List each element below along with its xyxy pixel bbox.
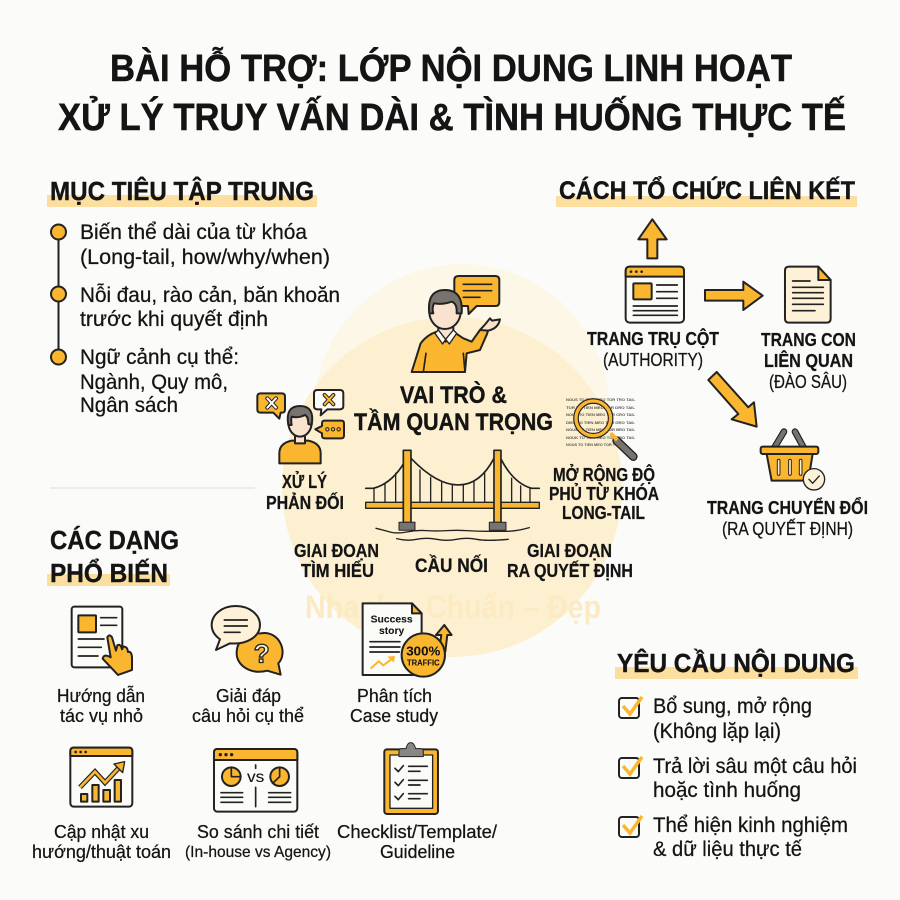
list text: hoặc tình huống xyxy=(653,779,801,802)
icon: magnifier over keywords xyxy=(566,398,635,457)
heading: cách tổ chức liên kết: CÁCH TỔ CHỨC LIÊN KẾT xyxy=(559,175,855,205)
list text: Ngữ cảnh cụ thể: xyxy=(80,346,239,369)
label: hướng dẫn tác vụ nhỏ: Hướng dẫn xyxy=(57,685,145,706)
label: xử lý phản đối: XỬ LÝ xyxy=(282,471,327,492)
arrow: up xyxy=(638,219,667,258)
label: so sánh chi tiết xyxy=(185,822,331,861)
icon: magnifier over keywords: NOUS TO TIEN MEO TOR CRO TAIL xyxy=(566,413,635,417)
label: so sánh chi tiết: (In-house vs Agency) xyxy=(185,844,331,861)
label: hướng dẫn tác vụ nhỏ xyxy=(57,685,145,726)
label: trang con liên quan: TRANG CON xyxy=(761,330,856,350)
icon: pillar page window xyxy=(626,267,684,323)
icon: case study document: TRAFFIC xyxy=(407,658,440,667)
heading: các dạng phổ biến: CÁC DẠNG xyxy=(50,525,179,555)
icon: question speech bubbles xyxy=(212,606,283,675)
label: giải đáp câu hỏi cụ thể xyxy=(192,686,304,726)
icon: magnifier over keywords: TOR TO TIEN MEO TOR DRO TAIL xyxy=(566,406,635,410)
label: trang chuyển đổi: TRANG CHUYỂN ĐỔI xyxy=(707,497,868,518)
panel: các dạng phổ biến xyxy=(32,525,497,862)
label: xử lý phản đối xyxy=(266,471,344,513)
label: trang con liên quan: LIÊN QUAN xyxy=(764,350,853,371)
icon: presenter with speech bubble xyxy=(412,276,500,372)
list text: (Không lặp lại) xyxy=(653,720,781,743)
icon: magnifier over keywords: NOUK TO TIEN MEO TOR TRO TAIL xyxy=(566,436,635,440)
icon: case study document: story xyxy=(379,626,405,637)
list text: Nỗi đau, rào cản, băn khoăn xyxy=(80,284,340,307)
label: mở rộng độ phủ từ khóa: LONG-TAIL xyxy=(562,503,645,523)
icon: suspension bridge xyxy=(366,450,539,540)
heading: mục tiêu tập trung: MỤC TIÊU TẬP TRUNG xyxy=(50,176,314,206)
label: cập nhật xu hướng xyxy=(32,822,171,862)
icon: magnifier over keywords: NOUS TO TIEN MEO TOR TO xyxy=(566,443,619,447)
heading: vai trò và tầm quan trọng: VAI TRÒ & xyxy=(400,381,507,409)
title: XỬ LÝ TRUY VẤN DÀI & TÌNH HUỐNG THỰC TẾ xyxy=(58,94,846,139)
heading: yêu cầu nội dung: YÊU CẦU NỘI DUNG xyxy=(617,648,855,678)
list text: Ngân sách xyxy=(80,394,178,417)
list text: & dữ liệu thực tế xyxy=(653,838,802,861)
label: checklist template guideline: Checklist/Template/ xyxy=(337,822,497,842)
icon: comparison window xyxy=(214,749,297,812)
label: cập nhật xu hướng: Cập nhật xu xyxy=(54,822,149,842)
label: mở rộng độ phủ từ khóa: MỞ RỘNG ĐỘ xyxy=(553,464,655,485)
label: xử lý phản đối: PHẢN ĐỐI xyxy=(266,492,344,513)
list text xyxy=(80,221,340,417)
label: checklist template guideline: Guideline xyxy=(380,842,455,862)
icon: comparison window: vs xyxy=(247,769,265,786)
list text: Thể hiện kinh nghiệm xyxy=(653,814,848,837)
list text: Trả lời sâu một câu hỏi xyxy=(653,755,857,778)
icon: question speech bubbles: ? xyxy=(254,639,270,669)
icon: shopping basket xyxy=(761,432,825,490)
label: giai đoạn tìm hiểu: TÌM HIỂU xyxy=(301,560,374,581)
icons: checkboxes xyxy=(619,697,642,837)
label: giai đoạn tìm hiểu: GIAI ĐOẠN xyxy=(294,541,379,561)
icon: clipboard checklist xyxy=(384,743,438,814)
label: giai đoạn tìm hiểu xyxy=(294,541,379,581)
arrow: diagonal to conversion page xyxy=(708,372,757,427)
panel: cách tổ chức liên kết xyxy=(556,175,868,539)
icon: case study document xyxy=(363,603,452,677)
timeline bullets xyxy=(51,224,66,364)
label: trang chuyển đổi: (RA QUYẾT ĐỊNH) xyxy=(722,518,853,539)
label: mở rộng độ phủ từ khóa xyxy=(549,464,659,523)
label: giai đoạn ra quyết định xyxy=(507,541,633,581)
list text: trước khi quyết định xyxy=(80,308,268,331)
list text: (Long-tail, how/why/when) xyxy=(80,246,330,269)
icon: tutorial document with hand xyxy=(72,607,132,675)
background watermark: Nhanh – Chuẩn – Đẹp xyxy=(305,589,601,625)
list text xyxy=(653,695,857,861)
label: giải đáp câu hỏi cụ thể: Giải đáp xyxy=(216,686,281,706)
label: phân tích case study: Case study xyxy=(350,706,438,726)
heading: vai trò và tầm quan trọng xyxy=(354,381,553,436)
panel: yêu cầu nội dung xyxy=(615,648,858,861)
label: trang con liên quan xyxy=(761,330,856,392)
label: phân tích case study xyxy=(350,686,438,726)
label: phân tích case study: Phân tích xyxy=(357,686,432,706)
list text: Ngành, Quy mô, xyxy=(80,371,228,394)
heading: vai trò và tầm quan trọng: TẦM QUAN TRỌNG xyxy=(354,408,553,436)
heading: các dạng phổ biến: PHỔ BIẾN xyxy=(50,558,168,588)
label: cập nhật xu hướng: hướng/thuật toán xyxy=(32,842,171,862)
icon: person with objections xyxy=(257,390,344,463)
icon: magnifier over keywords: NOUS TO TIEN MEO TOR BRO TAIL xyxy=(566,428,635,432)
label: checklist template guideline xyxy=(337,822,497,862)
label: so sánh chi tiết: So sánh chi tiết xyxy=(197,822,319,842)
label: hướng dẫn tác vụ nhỏ: tác vụ nhỏ xyxy=(60,706,143,726)
icon: trend chart window xyxy=(70,748,132,807)
label: giai đoạn ra quyết định: GIAI ĐOẠN xyxy=(527,541,612,561)
list text: Biến thể dài của từ khóa xyxy=(80,221,307,244)
label: giai đoạn ra quyết định: RA QUYẾT ĐỊNH xyxy=(507,560,633,581)
title: BÀI HỖ TRỢ: LỚP NỘI DUNG LINH HOẠT xyxy=(110,45,792,90)
heading: các dạng phổ biến xyxy=(47,525,179,588)
label: trang chuyển đổi xyxy=(707,497,868,539)
icon: sub page document xyxy=(785,267,831,323)
label: trang trụ cột: (AUTHORITY) xyxy=(603,350,703,370)
label: giải đáp câu hỏi cụ thể: câu hỏi cụ thể xyxy=(192,706,304,726)
background watermark xyxy=(282,264,622,657)
title xyxy=(58,45,846,139)
icon: magnifier over keywords: DIES TO TIEN MEO TOR GRO TAIL xyxy=(566,421,635,425)
panel: vai trò và tầm quan trọng xyxy=(257,276,659,581)
icon: case study document: 300% xyxy=(406,643,440,658)
icon: magnifier over keywords: NOUS TO TIEN MEO TOR TRO TAIL xyxy=(566,398,635,402)
panel: mục tiêu tập trung xyxy=(47,176,340,417)
list text: Bổ sung, mở rộng xyxy=(653,695,812,718)
label: trang trụ cột: TRANG TRỤ CỘT xyxy=(587,328,719,349)
label: trang trụ cột xyxy=(587,328,719,370)
label: trang con liên quan: (ĐÀO SÂU) xyxy=(769,372,847,392)
arrow: right xyxy=(705,282,763,310)
label: mở rộng độ phủ từ khóa: PHỦ TỪ KHÓA xyxy=(549,483,659,504)
icon: case study document: Success xyxy=(371,615,413,626)
label: cầu nối: CẦU NỐI xyxy=(415,555,488,577)
